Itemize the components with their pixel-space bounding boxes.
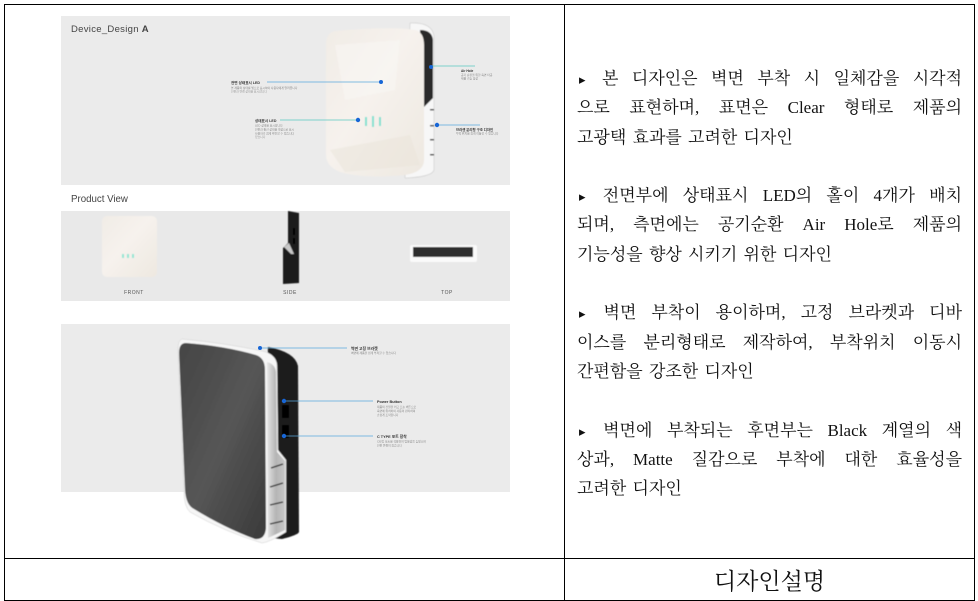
paragraph 4: 고려한 디자인 — [577, 479, 682, 498]
paragraph 2: ▸ 전면부에 상태표시 LED의 홀이 4개가 배치 — [579, 186, 962, 205]
view: top: TOP — [441, 290, 453, 296]
paragraph 2: 되며, 측면에는 공기순환 Air Hole로 제품의 — [577, 215, 962, 234]
paragraph 3: 간편함을 강조한 디자인 — [577, 362, 754, 381]
callout: air hole: Air Hole — [461, 69, 473, 73]
view: side: SIDE — [283, 290, 297, 296]
callout: indicator LED: 있습니다 — [255, 135, 266, 139]
paragraph 4: 상과, Matte 질감으로 부착에 대한 효율성을 — [577, 450, 962, 469]
paragraph 3: ▸ 벽면 부착이 용이하며, 고정 브라켓과 디바 — [579, 303, 962, 322]
callout: air hole — [429, 65, 493, 80]
paragraph 1 — [577, 69, 962, 147]
callout: C-type port: C TYPE 포트 장착 — [377, 434, 407, 439]
callout: status LED — [231, 80, 383, 94]
heading: Device_Design A: Device_Design A — [71, 24, 149, 35]
paragraph 2: 기능성을 향상 시키기 위한 디자인 — [577, 245, 832, 264]
callout: indicator LED — [255, 118, 360, 139]
callout: status LED: 본 제품의 상태를 빛으로 표시하여 사용자에게 알려줍니다 — [231, 86, 298, 90]
callout: air hole: 공기 순환을 위한 측면 타공 — [461, 73, 493, 77]
callout: bracket: 브라켓 분리형 구조 디자인 — [456, 127, 493, 132]
view: front — [102, 216, 157, 296]
callout: C-type port: C타입 포트를 적용하여 범용성을 높였으며 — [377, 440, 426, 444]
paragraph 4 — [577, 421, 962, 498]
callout: air hole: 제품 기능 향상 — [461, 76, 478, 80]
callout: power button: 측면에 위치하여 사용이 편리하며 — [377, 409, 416, 413]
callout: bracket: 부착 위치를 쉽게 이동할 수 있습니다 — [456, 132, 499, 136]
callout: power button: 제품의 전원을 켜고 끄는 버튼으로 — [377, 405, 417, 409]
paragraph 1: 고광택 효과를 고려한 디자인 — [577, 128, 793, 147]
panel: Device Design A — [61, 16, 510, 185]
callout: power button: Power Button — [377, 400, 402, 404]
callout: status LED: 전원과 연결 상태를 표시합니다 — [231, 90, 267, 94]
callout: indicator LED: 전원과 통신 상태를 색상으로 표시 — [255, 128, 295, 132]
callout: bracket — [435, 123, 499, 136]
callout: indicator LED: LED 상태를 표시합니다 — [255, 124, 283, 128]
heading: Product View: Product View — [71, 194, 129, 205]
view: front: FRONT — [124, 290, 144, 296]
callout: indicator LED: 상태표시 LED — [255, 118, 277, 123]
paragraph 4: ▸ 벽면에 부착되는 후면부는 Black 계열의 색 — [579, 421, 962, 440]
paragraph 1: 으로 표현하며, 표면은 Clear 형태로 제품의 — [577, 98, 962, 117]
view: side — [283, 211, 299, 296]
view: top — [410, 245, 477, 296]
panel: Product View — [61, 211, 510, 301]
callout: wall bracket: 벽면에 제품을 쉽게 부착할 수 있습니다 — [351, 351, 396, 355]
callout: C-type port: 전원 연결이 쉽습니다 — [377, 444, 402, 448]
panel: rear view — [61, 324, 510, 543]
caption: design description: 디자인설명 — [714, 568, 825, 594]
paragraph 3 — [577, 303, 962, 381]
paragraph 3: 이스를 분리형태로 제작하여, 부착위치 이동시 — [577, 333, 962, 352]
callout: C-type port — [282, 434, 426, 448]
device rear view — [178, 339, 299, 543]
callout: power button — [282, 399, 417, 417]
callout: indicator LED: 사용자가 쉽게 확인할 수 있습니다 — [255, 132, 295, 136]
callout: status LED: 전면 상태표시 LED — [231, 80, 260, 85]
callout: wall bracket — [258, 346, 396, 355]
callout: power button: 손쉽게 조작합니다 — [377, 413, 399, 417]
paragraph 1: ▸ 본 디자인은 벽면 부착 시 일체감을 시각적 — [579, 69, 962, 88]
callout: wall bracket: 벽면 고정 브라켓 — [351, 346, 378, 351]
device front view — [326, 23, 434, 178]
paragraph 2 — [577, 186, 962, 264]
